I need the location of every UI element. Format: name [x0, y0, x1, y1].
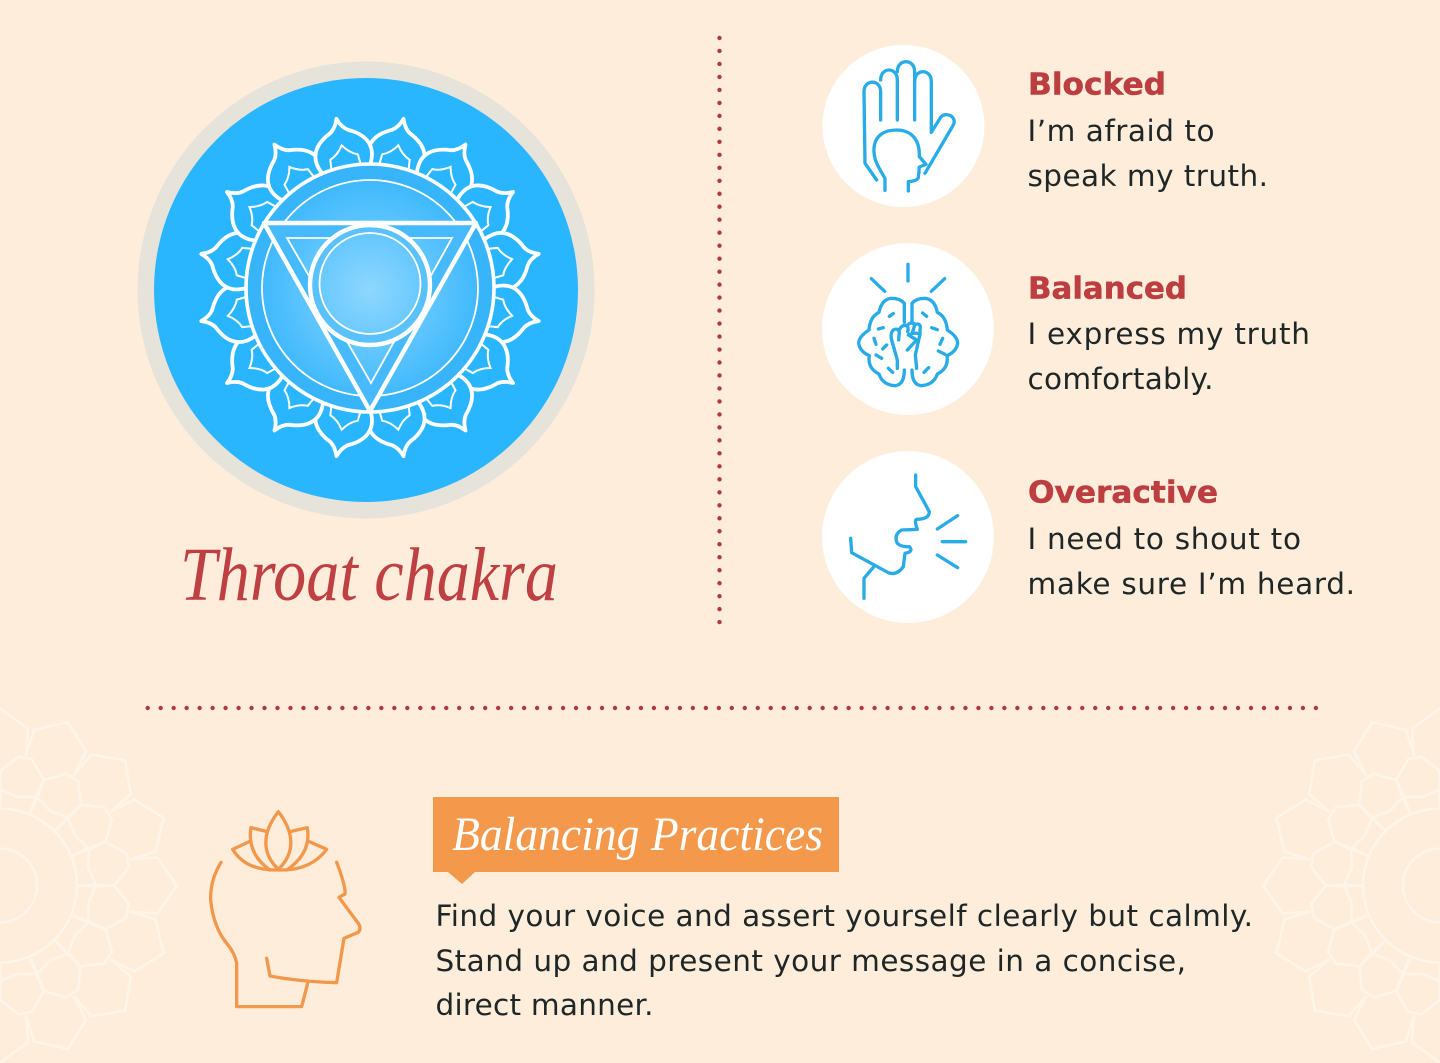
title: Throat chakra: Throat chakra	[180, 533, 558, 617]
text: balancing practices description: direct manner.	[436, 988, 654, 1022]
text: balanced statement: comfortably.	[1028, 362, 1214, 396]
text: blocked statement	[1028, 114, 1268, 193]
icon: hand and head	[822, 45, 984, 207]
text: overactive statement: make sure I’m heard.	[1028, 567, 1355, 601]
icon: head with lotus	[211, 812, 360, 1007]
icon: brain and fist	[822, 243, 994, 415]
label: Overactive: Overactive	[1028, 476, 1218, 510]
label: Balanced: Balanced	[1028, 272, 1187, 306]
text: balanced statement	[1028, 317, 1310, 396]
text: blocked statement: I’m afraid to	[1028, 114, 1214, 148]
text: balancing practices description: Find your voice and assert yourself clearly but calmly.	[436, 899, 1253, 933]
chakra symbol	[138, 62, 594, 518]
panel: balanced state	[822, 243, 1310, 415]
label: Blocked: Blocked	[1028, 68, 1166, 102]
panel: blocked state	[822, 45, 1268, 207]
banner: Balancing Practices: Balancing Practices	[452, 808, 823, 861]
text: balanced statement: I express my truth	[1028, 317, 1310, 351]
text: balancing practices description	[436, 899, 1253, 1022]
text: balancing practices description: Stand up and present your message in a concise,	[436, 944, 1186, 978]
icon: shouting face	[822, 451, 994, 623]
text: overactive statement	[1028, 522, 1355, 601]
panel: overactive state	[822, 451, 1355, 623]
banner: Balancing Practices	[433, 797, 839, 884]
text: overactive statement: I need to shout to	[1028, 522, 1301, 556]
text: blocked statement: speak my truth.	[1028, 159, 1268, 193]
